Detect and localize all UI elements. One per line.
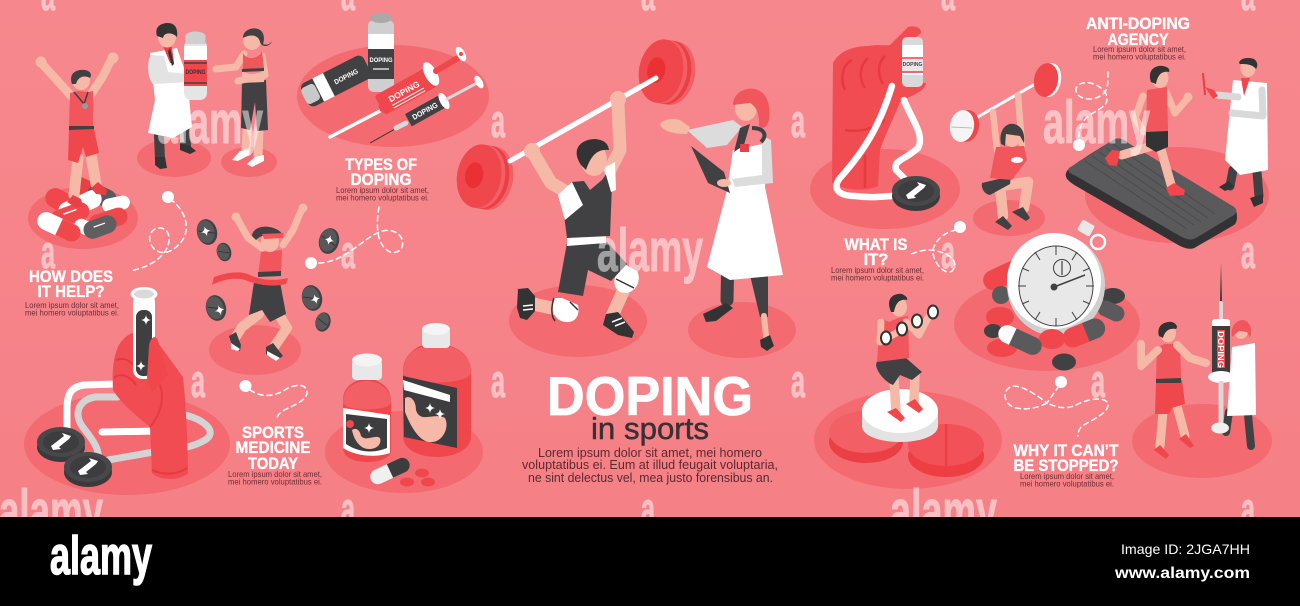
thumb [147,337,168,392]
watermarks: a [191,355,205,407]
platform ellipses [509,285,796,358]
caption: mei homero voluptatibus ei. [1093,52,1186,62]
heading: WHY IT CAN’T [1014,442,1118,460]
platform ellipse [954,277,1140,371]
heading [1014,442,1118,475]
winning athlete [36,52,118,207]
url: www.alamy.com [1114,565,1250,582]
female athlete [216,28,272,167]
heading: AGENCY [1108,31,1168,49]
platform ellipses [137,139,277,177]
female doctor [660,89,783,351]
nurse [1226,320,1256,446]
caption: Lorem ipsum dolor sit amet, [336,185,429,195]
medal ribbon [67,384,210,460]
heading [1086,15,1190,49]
athlete with dumbbells [876,294,938,422]
white ribbon [836,86,920,197]
pills in front [995,315,1108,370]
heading: WHAT IS [844,236,908,254]
panel: female lifter [947,61,1064,236]
heading [844,236,908,269]
dashed connector [240,380,307,419]
big bottle [403,323,471,457]
watermarks: a [1091,355,1105,407]
image id: Image ID: 2JGA7HH [1121,541,1250,557]
heading [236,424,310,473]
watermarks: a [641,483,655,535]
heading: BE STOPPED? [1014,457,1118,475]
vial: DOPING [903,62,922,68]
dashed connector [305,207,403,269]
panel: running woman [194,204,342,375]
heading [29,268,113,301]
caption: mei homero voluptatibus ei. [228,476,322,486]
main description: Lorem ipsum dolor sit amet, mei homero [538,446,762,460]
heading: TYPES OF [345,156,417,174]
platform ellipses [24,393,483,495]
red hand [832,26,926,190]
bottle: DOPING [186,69,206,76]
capsule and tablets [368,455,435,487]
giant syringe: DOPING [1216,331,1225,368]
platform ellipse [28,187,138,249]
doctor [1203,58,1268,207]
watermarks: a [341,226,355,278]
panel: central weightlifter and doctor [452,36,796,485]
vial lying: DOPING [333,68,360,86]
heading: IT? [864,251,888,269]
white pill [862,389,938,442]
caption: Lorem ipsum dolor sit amet, [1093,44,1186,54]
red tablets [829,411,984,477]
caption [25,300,119,318]
stopwatch [1007,219,1105,336]
panel: types of doping [297,13,489,269]
watermarks: a [941,226,955,278]
panel: doctor and female athlete [137,23,277,177]
dashed connector [1073,72,1108,151]
heading: TODAY [248,455,298,473]
panel: athlete on pill [814,294,1002,489]
red syringe [330,45,468,137]
panel: stopwatch and pills [954,219,1140,371]
runner [212,204,308,361]
dashed connector [130,191,186,271]
barbell [452,36,700,214]
footer bar [0,517,1300,606]
caption: Lorem ipsum dolor sit amet, [25,300,119,310]
panel: sports medicine today [24,287,483,495]
barbell [947,61,1064,144]
hand shading [842,56,885,188]
heading: IT HELP? [38,283,104,301]
doctor [148,23,196,169]
watermarks: a [491,95,505,147]
main title: in sports [591,411,709,446]
main description: ne sint delectus vel, mea justo forensibus an. [528,471,773,485]
main description: voluptatibus ei. Eum at illud feugait voluptaria, [522,458,778,472]
caption [1093,44,1186,62]
bottle [184,32,207,100]
test tube [130,287,158,379]
watermarks: a [491,355,505,407]
dashed connector [908,221,966,272]
platform ellipse [814,391,1002,489]
caption [1020,471,1114,488]
red hand [113,332,188,479]
gray syringe [370,74,485,143]
medal [892,176,940,211]
caption: Lorem ipsum dolor sit amet, [831,265,924,275]
lifter [982,95,1030,230]
pills behind [980,257,1127,357]
watermarks: alamy [0,478,103,545]
watermarks: alamy [1043,89,1150,156]
watermarks: alamy [890,478,997,545]
watermarks: a [341,483,355,535]
platform ellipse [297,45,489,147]
caption: mei homero voluptatibus ei. [336,192,429,202]
platform ellipse [1132,404,1272,478]
dashed connector [1005,376,1108,436]
panel: what is it [810,26,966,283]
watermarks: a [1241,226,1255,278]
platform ellipse [973,200,1045,236]
heading: DOPING [350,171,412,189]
pill pile [34,174,131,245]
heading: HOW DOES [29,268,113,286]
caption: mei homero voluptatibus ei. [831,272,924,282]
caption: mei homero voluptatibus ei. [25,308,119,318]
small bottle [343,354,391,462]
caption [228,469,322,486]
platform ellipse [209,325,301,375]
watermarks: a [791,95,805,147]
runner [1105,66,1192,196]
panel: anti-doping agency [1066,15,1269,249]
platform ellipse [810,149,960,229]
treadmill [1066,139,1237,249]
vial upright [368,13,394,92]
weightlifter [517,91,639,338]
caption [336,185,429,202]
panel: how does it help [25,52,186,318]
giant syringe [1208,263,1234,434]
caption [831,265,924,282]
vial upright: DOPING [370,57,392,64]
watermarks: alamy [597,217,703,284]
platform ellipse [1085,147,1269,243]
gray syringe: DOPING [411,100,440,122]
athlete [1141,322,1206,459]
main title: DOPING [547,365,753,427]
main description [522,446,778,485]
flying weight plates [194,217,342,333]
heading: ANTI-DOPING [1086,15,1190,33]
caption: Lorem ipsum dolor sit amet, [1020,471,1114,481]
caption: Lorem ipsum dolor sit amet, [228,469,322,479]
watermarks: a [791,355,805,407]
watermarks: a [41,226,55,278]
heading: MEDICINE [236,439,310,457]
panel: why it can't be stopped [1005,263,1272,488]
logo: alamy [50,526,152,586]
medal discs [37,427,112,487]
heading: SPORTS [242,424,304,442]
vial lying [298,54,373,109]
watermarks: alamy [157,89,263,156]
heading [345,156,417,189]
hand shading [114,359,187,474]
red syringe: DOPING [387,79,422,104]
vial [902,37,923,87]
watermarks: a [1241,483,1255,535]
caption: mei homero voluptatibus ei. [1020,478,1114,488]
